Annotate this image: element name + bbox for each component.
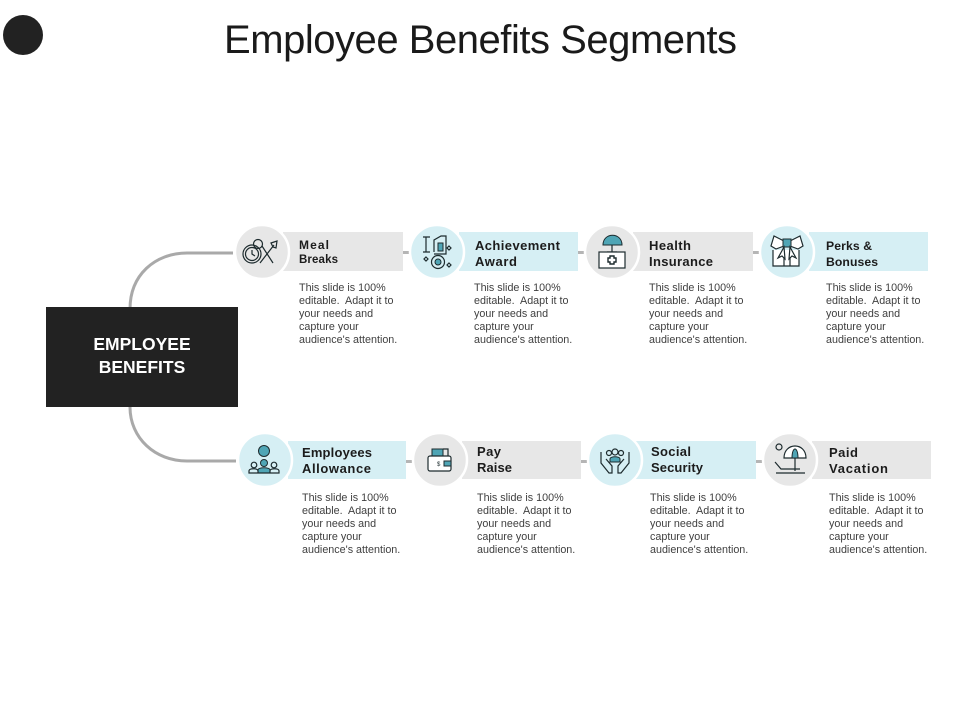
segment: Pay Raise (413, 433, 581, 556)
icon: coin above three employees (249, 446, 279, 473)
segment: Health Insurance (585, 225, 753, 346)
description: audience's attention. (650, 544, 748, 556)
central box: employee benefits: EMPLOYEE (93, 334, 191, 354)
description: editable. Adapt it to (299, 295, 393, 307)
description: This slide is 100% (302, 492, 389, 504)
description (477, 492, 575, 556)
description: capture your (649, 321, 709, 333)
description: your needs and (650, 518, 724, 530)
description: your needs and (302, 518, 376, 530)
description (302, 492, 400, 556)
description: audience's attention. (302, 544, 400, 556)
description: This slide is 100% (474, 282, 561, 294)
description: editable. Adapt it to (650, 505, 744, 517)
heading (477, 444, 512, 475)
heading: Vacation (829, 461, 888, 476)
heading: Security (651, 460, 704, 475)
heading: Achievement (475, 238, 561, 253)
decorative dark dot (3, 15, 43, 55)
segment: Social Security (588, 433, 756, 556)
heading: Social (651, 444, 691, 459)
heading: Paid (829, 445, 858, 460)
description: editable. Adapt it to (477, 505, 571, 517)
heading (302, 445, 372, 476)
central box: employee benefits: BENEFITS (99, 357, 185, 377)
description: editable. Adapt it to (829, 505, 923, 517)
description: editable. Adapt it to (826, 295, 920, 307)
description: capture your (826, 321, 886, 333)
icon: beach umbrella and lounger (775, 444, 806, 473)
description: audience's attention. (649, 334, 747, 346)
description: capture your (829, 531, 889, 543)
description: editable. Adapt it to (649, 295, 743, 307)
description: This slide is 100% (826, 282, 913, 294)
description: your needs and (477, 518, 551, 530)
heading: Bonuses (826, 255, 878, 269)
icon: wallet with cash: $ (437, 462, 441, 468)
heading: Employees (302, 445, 372, 460)
segment: Meal Breaks (235, 225, 403, 346)
heading: Breaks (299, 254, 338, 266)
description: editable. Adapt it to (474, 295, 568, 307)
description: your needs and (829, 518, 903, 530)
description: audience's attention. (477, 544, 575, 556)
central box: employee benefits (46, 307, 238, 407)
connector dashes (403, 251, 762, 463)
heading (299, 238, 338, 266)
description: capture your (299, 321, 359, 333)
description: audience's attention. (299, 334, 397, 346)
icon: umbrella and medical case (599, 235, 625, 268)
description (649, 282, 747, 346)
description (826, 282, 924, 346)
heading (829, 445, 888, 476)
segment: Employees Allowance (238, 433, 406, 556)
description (650, 492, 748, 556)
description: This slide is 100% (650, 492, 737, 504)
heading: Pay (477, 444, 502, 459)
heading (475, 238, 561, 269)
description: your needs and (649, 308, 723, 320)
description: This slide is 100% (829, 492, 916, 504)
heading: Raise (477, 460, 512, 475)
heading (649, 238, 713, 269)
description: your needs and (826, 308, 900, 320)
description (829, 492, 927, 556)
description (474, 282, 572, 346)
description: capture your (477, 531, 537, 543)
heading (826, 239, 878, 269)
heading: Health (649, 238, 691, 253)
heading: Perks & (826, 239, 872, 253)
description (299, 282, 397, 346)
description: capture your (474, 321, 534, 333)
description: capture your (650, 531, 710, 543)
heading: Allowance (302, 461, 371, 476)
description: editable. Adapt it to (302, 505, 396, 517)
description: your needs and (474, 308, 548, 320)
description: audience's attention. (826, 334, 924, 346)
heading: Meal (299, 238, 329, 252)
segment: Achievement Award (410, 225, 578, 346)
heading: Award (475, 254, 517, 269)
segment: Paid Vacation (763, 433, 931, 556)
description: This slide is 100% (299, 282, 386, 294)
description: your needs and (299, 308, 373, 320)
icon: wallet with cash (428, 449, 451, 471)
description: This slide is 100% (477, 492, 564, 504)
description: audience's attention. (474, 334, 572, 346)
connector: lower curve (130, 407, 236, 461)
icon: gift box with bow (771, 236, 803, 266)
icon: hands holding people (601, 449, 629, 473)
description: capture your (302, 531, 362, 543)
heading (651, 444, 704, 475)
segment: Perks & Bonuses (760, 225, 928, 346)
description: audience's attention. (829, 544, 927, 556)
icon: clock and cutlery (243, 240, 277, 263)
heading: Insurance (649, 254, 713, 269)
description: This slide is 100% (649, 282, 736, 294)
icon: award hand and medal (423, 236, 451, 268)
connector: upper curve (130, 253, 233, 309)
title: Employee Benefits Segments (224, 18, 737, 62)
